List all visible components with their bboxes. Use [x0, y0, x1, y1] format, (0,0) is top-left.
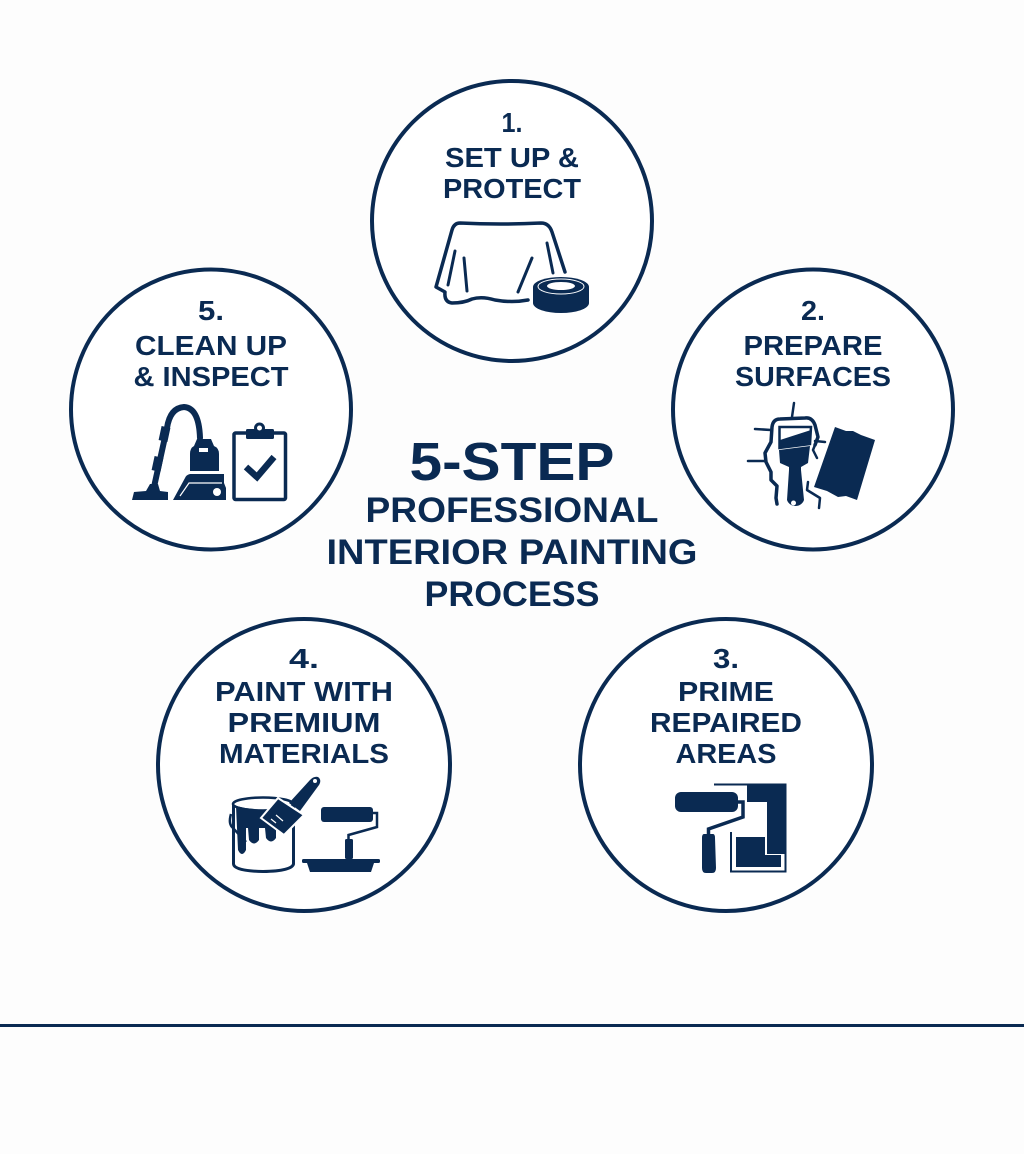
- step 2 heading: [735, 295, 891, 392]
- step 1 heading: PROTECT: [443, 173, 581, 204]
- panel: step 5 clean up and inspect: [71, 270, 351, 550]
- icon: paint roller and primed wall patches: [675, 784, 786, 873]
- title: [326, 432, 698, 614]
- step 2 heading: PREPARE: [744, 330, 882, 361]
- icon: drop cloth and tape roll: [436, 223, 589, 313]
- icon: brush on cracked wall with scraper: [748, 403, 875, 508]
- step 3 heading: REPAIRED: [650, 707, 802, 738]
- panel: step 2 prepare surfaces: [673, 270, 953, 550]
- title: PROFESSIONAL: [366, 491, 658, 530]
- panel: step 3 prime repaired areas: [580, 619, 872, 911]
- step 5 heading: & INSPECT: [134, 361, 288, 392]
- title: 5-STEP: [410, 432, 614, 492]
- title: PROCESS: [424, 575, 600, 614]
- step 2 heading: 2.: [801, 295, 825, 326]
- icon: clipboard with check mark: [234, 424, 286, 500]
- icon: vacuum cleaner: [132, 407, 226, 500]
- step 2 heading: SURFACES: [735, 361, 891, 392]
- title: INTERIOR PAINTING: [326, 533, 698, 572]
- step 1 heading: 1.: [502, 107, 522, 138]
- step 5 heading: 5.: [198, 295, 224, 326]
- step 1 heading: [443, 107, 581, 204]
- step 5 heading: [134, 295, 288, 392]
- step 3 heading: [650, 643, 802, 769]
- icon: paint can, brush, roller and tray: [230, 777, 380, 872]
- step 4 heading: 4.: [289, 643, 319, 674]
- step 4 heading: PREMIUM: [228, 707, 380, 738]
- step 3 heading: PRIME: [678, 676, 774, 707]
- step 3 heading: AREAS: [676, 738, 776, 769]
- step 4 heading: MATERIALS: [219, 738, 389, 769]
- panel: step 4 paint with premium materials: [158, 619, 450, 911]
- step 3 heading: 3.: [713, 643, 739, 674]
- panel: step 1 set up and protect: [372, 81, 652, 361]
- step 5 heading: CLEAN UP: [135, 330, 287, 361]
- step 4 heading: [215, 643, 393, 769]
- step 1 heading: SET UP &: [445, 142, 579, 173]
- step 4 heading: PAINT WITH: [215, 676, 393, 707]
